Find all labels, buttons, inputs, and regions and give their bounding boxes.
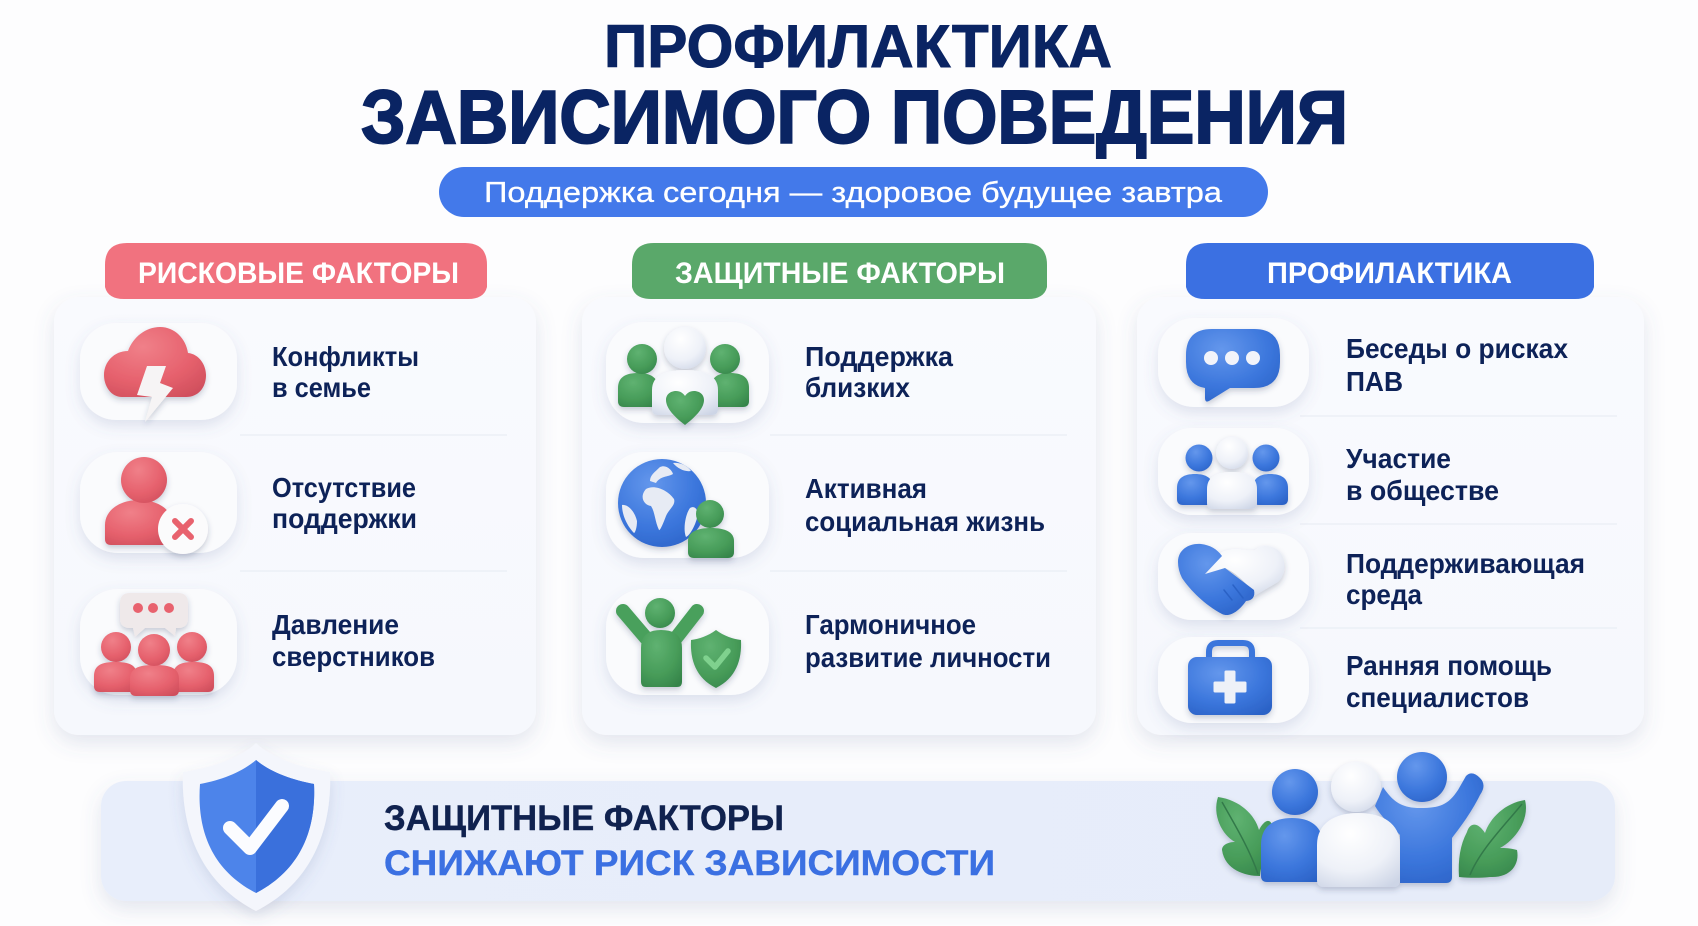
icon: people with leaves	[1216, 752, 1526, 887]
text: talks about risks: ПАВ	[1346, 366, 1403, 397]
title	[361, 13, 1348, 159]
text: active social life	[805, 473, 1045, 537]
text: active social life: Активная	[805, 473, 927, 504]
text: harmonious development	[805, 609, 1051, 673]
icon: handshake	[1178, 544, 1285, 615]
row: peer pressure	[80, 589, 435, 696]
icon: chat bubble	[1186, 329, 1280, 402]
tab: protective factors	[632, 243, 1047, 299]
subtitle pill	[439, 167, 1268, 217]
text: peer pressure	[272, 609, 435, 672]
subtitle pill: Поддержка сегодня — здоровое будущее завтра	[484, 177, 1223, 209]
text: harmonious development: развитие личности	[805, 642, 1051, 673]
icon: family with heart	[618, 327, 749, 425]
row: lack of support	[80, 452, 417, 554]
text: conflicts in family: Конфликты	[272, 341, 419, 372]
text: supportive environment: среда	[1346, 579, 1422, 610]
row: conflicts in family	[80, 323, 419, 422]
icon: globe with person	[618, 459, 734, 558]
row: supportive environment	[1158, 533, 1585, 620]
icon: peers with speech bubble	[94, 593, 214, 696]
text: supportive environment: Поддерживающая	[1346, 548, 1585, 579]
text: harmonious development: Гармоничное	[805, 609, 976, 640]
title: ПРОФИЛАКТИКА	[604, 13, 1112, 80]
text: participation in society: в обществе	[1346, 475, 1499, 506]
text: conflicts in family: в семье	[272, 372, 371, 403]
text: conclusion: ЗАЩИТНЫЕ ФАКТОРЫ	[384, 799, 784, 838]
text: early specialist help: специалистов	[1346, 682, 1529, 713]
row: harmonious development	[606, 589, 1051, 695]
icon: shield with check	[183, 743, 330, 911]
text: lack of support: Отсутствие	[272, 472, 416, 503]
text: lack of support: поддержки	[272, 503, 417, 534]
text: peer pressure: Давление	[272, 609, 399, 640]
tab: prevention: ПРОФИЛАКТИКА	[1267, 257, 1512, 290]
panel: prevention	[1137, 243, 1644, 735]
text: conclusion	[384, 799, 995, 883]
text: peer pressure: сверстников	[272, 641, 435, 672]
text: participation in society: Участие	[1346, 443, 1451, 474]
row: talks about risks	[1158, 318, 1568, 407]
panel: risk factors	[54, 243, 536, 735]
text: talks about risks	[1346, 333, 1568, 397]
text: early specialist help	[1346, 650, 1552, 713]
text: active social life: социальная жизнь	[805, 506, 1045, 537]
text: supportive environment	[1346, 548, 1585, 610]
title: ЗАВИСИМОГО ПОВЕДЕНИЯ	[361, 75, 1348, 159]
row: support of loved ones	[606, 322, 953, 425]
row: participation in society	[1158, 428, 1499, 515]
tab: risk factors: РИСКОВЫЕ ФАКТОРЫ	[138, 257, 459, 290]
tab: protective factors: ЗАЩИТНЫЕ ФАКТОРЫ	[675, 257, 1005, 290]
text: participation in society	[1346, 443, 1499, 506]
text: support of loved ones: Поддержка	[805, 341, 953, 372]
text: conflicts in family	[272, 341, 419, 403]
text: lack of support	[272, 472, 417, 534]
text: early specialist help: Ранняя помощь	[1346, 650, 1552, 681]
banner: conclusion	[101, 743, 1615, 911]
text: talks about risks: Беседы о рисках	[1346, 333, 1568, 364]
text: support of loved ones	[805, 341, 953, 403]
icon: storm cloud	[104, 327, 206, 422]
icon: group of people	[1177, 437, 1288, 509]
tab: prevention	[1186, 243, 1594, 299]
text: support of loved ones: близких	[805, 372, 910, 403]
text: conclusion: СНИЖАЮТ РИСК ЗАВИСИМОСТИ	[384, 844, 995, 883]
icon: person with cross	[105, 457, 208, 554]
row: early specialist help	[1158, 637, 1552, 723]
panel: protective factors	[582, 243, 1096, 735]
tab: risk factors	[105, 243, 487, 299]
row: active social life	[606, 452, 1045, 558]
icon: person with shield	[623, 598, 741, 688]
icon: first aid case	[1188, 643, 1272, 715]
